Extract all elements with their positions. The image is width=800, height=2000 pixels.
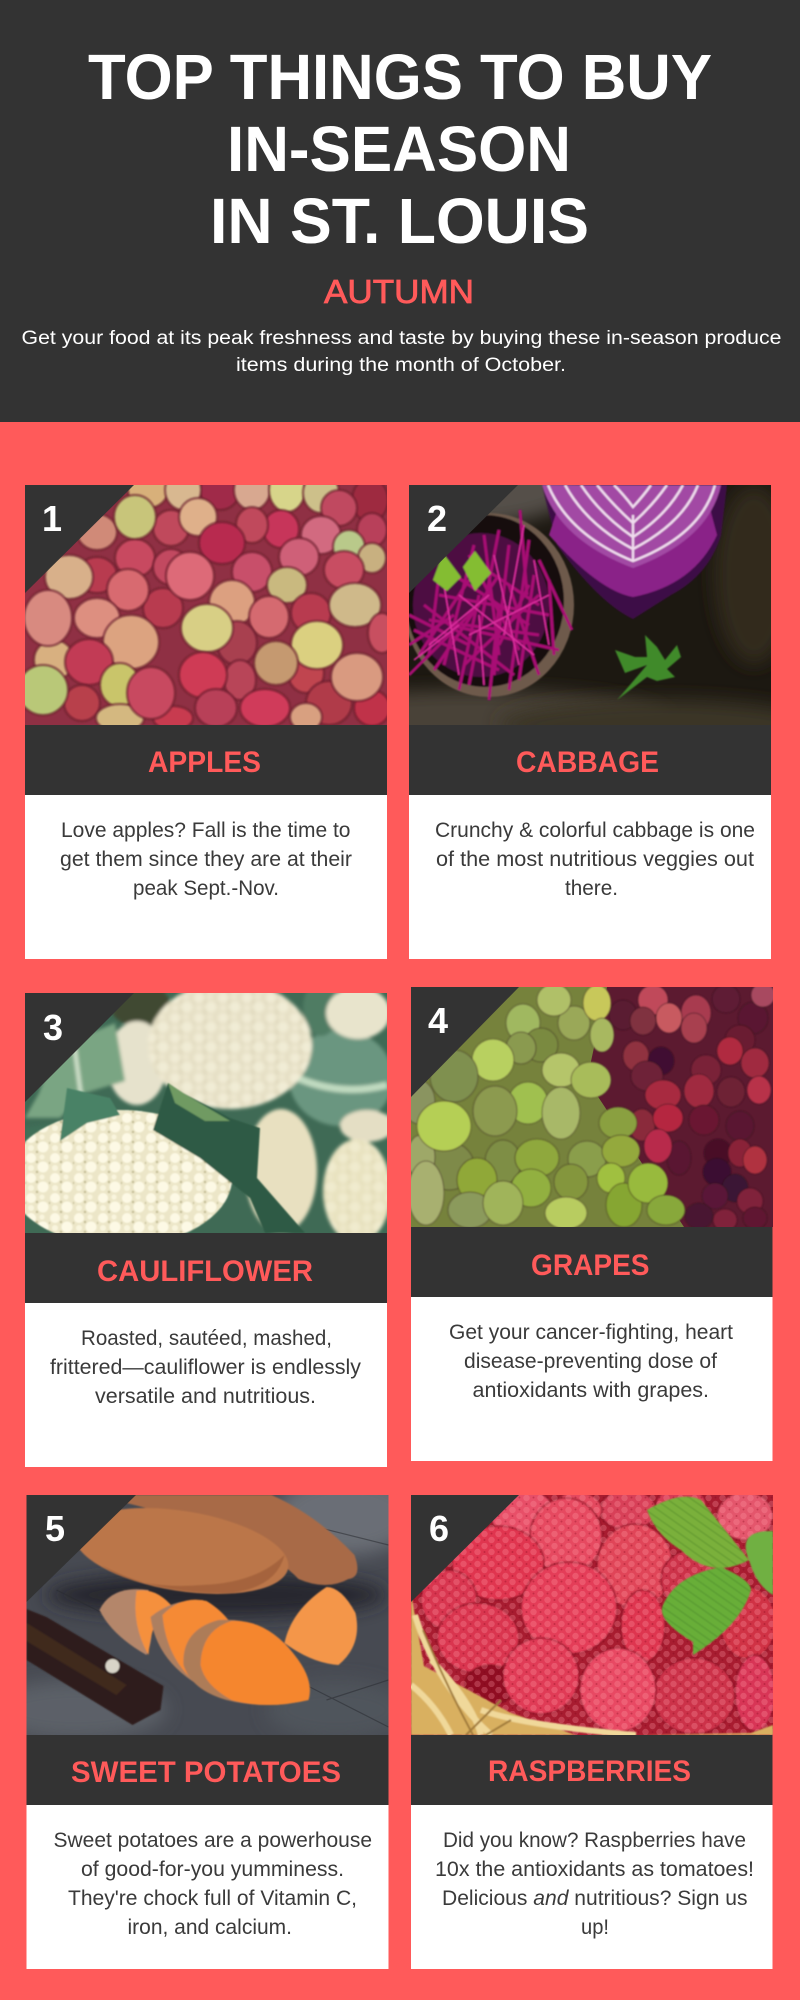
description: disease-preventing dose of: [464, 1350, 717, 1373]
card title: CAULIFLOWER: [97, 1255, 313, 1288]
title: TOP THINGS TO BUY: [88, 41, 712, 113]
number badge: 4: [428, 1000, 448, 1041]
description: Love apples? Fall is the time to: [61, 819, 350, 842]
number badge: [411, 987, 519, 1097]
description: [435, 819, 755, 900]
title band: [25, 725, 387, 795]
description: Crunchy & colorful cabbage is one: [435, 819, 755, 842]
description: Did you know? Raspberries have: [443, 1829, 746, 1852]
description: Get your cancer-fighting, heart: [449, 1321, 733, 1344]
description: up!: [581, 1916, 609, 1939]
title band: [411, 1227, 772, 1297]
cabbage photo: [409, 485, 771, 725]
number badge: 1: [42, 498, 62, 539]
description: [54, 1829, 372, 1939]
description: of good-for-you yumminess.: [81, 1858, 344, 1881]
title band: [411, 1735, 772, 1805]
title band: [26, 1735, 388, 1805]
grapes photo: [411, 987, 773, 1227]
card body: [409, 485, 771, 959]
description: [449, 1321, 733, 1402]
header panel: [0, 0, 800, 422]
card 1: apples: [18, 468, 396, 959]
number badge: [411, 1495, 519, 1602]
card body: [25, 993, 387, 1467]
number badge: [25, 993, 134, 1102]
number badge: 5: [45, 1508, 65, 1549]
description: Delicious and nutritious? Sign us: [442, 1887, 748, 1910]
title band: [409, 725, 771, 795]
description: there.: [565, 877, 618, 900]
description: 10x the antioxidants as tomatoes!: [435, 1858, 754, 1881]
card title: SWEET POTATOES: [71, 1756, 341, 1789]
card 3: cauliflower: [8, 980, 394, 1467]
description: get them since they are at their: [60, 848, 352, 871]
card 6: raspberries: [411, 1487, 776, 1969]
intro text: Get your food at its peak freshness and taste by buying these in-season produce: [22, 328, 782, 349]
number badge: 6: [429, 1508, 449, 1549]
number badge: 3: [43, 1007, 63, 1048]
intro text: [22, 328, 782, 376]
description: [50, 1327, 361, 1408]
raspberries photo: [411, 1495, 773, 1735]
description: [435, 1829, 754, 1939]
card 2: cabbage: [269, 445, 800, 959]
title band: [25, 1233, 387, 1303]
description: Roasted, sautéed, mashed,: [81, 1327, 332, 1350]
header background: [0, 0, 800, 422]
card 5: sweet potatoes: [0, 1475, 416, 1969]
number badge: [26, 1495, 136, 1602]
description: of the most nutritious veggies out: [436, 848, 754, 871]
title: IN ST. LOUIS: [210, 185, 589, 257]
number badge: [409, 485, 518, 593]
title: [88, 41, 712, 257]
description: versatile and nutritious.: [95, 1385, 316, 1408]
number badge: 2: [427, 498, 447, 539]
apples photo: [25, 485, 387, 725]
title: IN-SEASON: [227, 113, 571, 185]
card title: RASPBERRIES: [488, 1755, 691, 1788]
sweet potatoes photo: [26, 1495, 388, 1735]
intro text: items during the month of October.: [236, 355, 566, 376]
cauliflower photo: [25, 993, 387, 1233]
card body: [411, 987, 772, 1461]
card 4: grapes: [403, 983, 775, 1461]
card title: GRAPES: [531, 1249, 650, 1282]
card body: [411, 1495, 772, 1969]
description: Sweet potatoes are a powerhouse: [54, 1829, 372, 1852]
description: iron, and calcium.: [128, 1916, 292, 1939]
description: antioxidants with grapes.: [472, 1379, 709, 1402]
card body: [25, 485, 387, 959]
card title: CABBAGE: [516, 746, 659, 779]
card body: [26, 1495, 388, 1969]
card title: APPLES: [148, 746, 261, 779]
description: frittered—cauliflower is endlessly: [50, 1356, 361, 1379]
description: They're chock full of Vitamin C,: [68, 1887, 357, 1910]
description: [60, 819, 352, 900]
description: peak Sept.-Nov.: [133, 877, 279, 900]
season heading: AUTUMN: [324, 273, 474, 310]
number badge: [25, 485, 134, 593]
